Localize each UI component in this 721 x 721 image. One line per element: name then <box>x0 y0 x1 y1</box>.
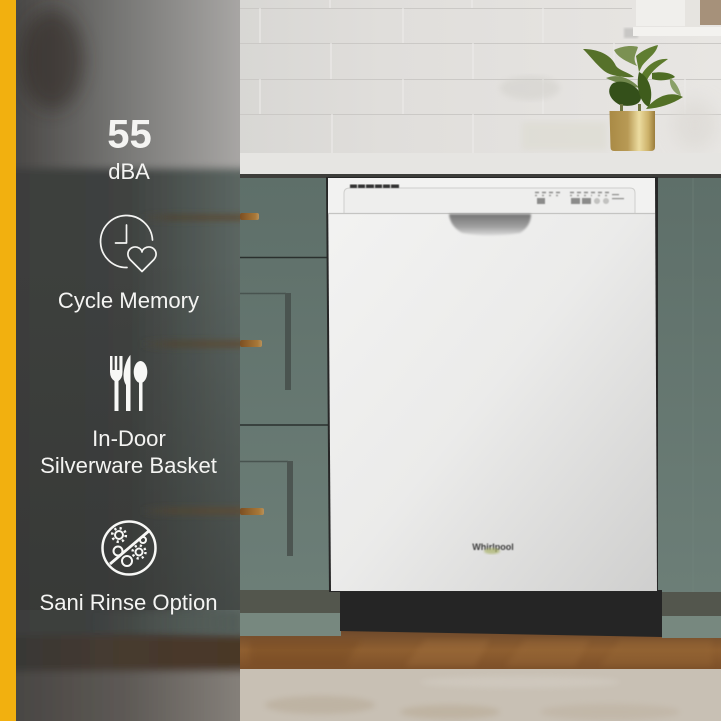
feature: Cycle Memory <box>58 216 199 313</box>
door <box>326 177 658 592</box>
feature: Sani Rinse Option <box>39 522 218 615</box>
wall shelf <box>624 0 721 38</box>
right cabinet <box>657 178 721 592</box>
icon: fork, knife and spoon <box>110 355 147 411</box>
control buttons <box>535 192 624 204</box>
feature: Cycle Memory: Cycle Memory <box>58 288 199 313</box>
feature: In-Door Silverware Basket: In-Door <box>92 426 166 451</box>
left cabinet drawers <box>240 178 330 592</box>
potted plant <box>583 45 683 151</box>
feature: In-Door Silverware Basket: Silverware Basket <box>40 453 217 478</box>
dark translucent side panel <box>16 0 240 721</box>
vent marks <box>350 184 399 188</box>
background: tiled wall <box>240 0 721 155</box>
icon: clock with heart <box>101 216 156 272</box>
feature: Sani Rinse Option: Sani Rinse Option <box>39 590 218 615</box>
dishwasher <box>326 177 658 592</box>
gold pot <box>610 111 655 151</box>
kickplate and base <box>240 590 721 638</box>
yellow accent bar <box>0 0 16 721</box>
logo: Whirlpool <box>472 542 514 552</box>
feature: 55 dBA <box>107 112 152 184</box>
feature: 55 dBA: 55 <box>107 112 152 156</box>
door handle recess <box>449 214 531 236</box>
icon: sanitize circle with germs <box>102 522 156 574</box>
control panel <box>328 178 655 214</box>
feature: 55 dBA: dBA <box>108 159 150 184</box>
countertop <box>240 153 721 178</box>
rug <box>240 669 721 721</box>
floor <box>240 631 721 669</box>
feature: In-Door Silverware Basket <box>40 355 217 478</box>
